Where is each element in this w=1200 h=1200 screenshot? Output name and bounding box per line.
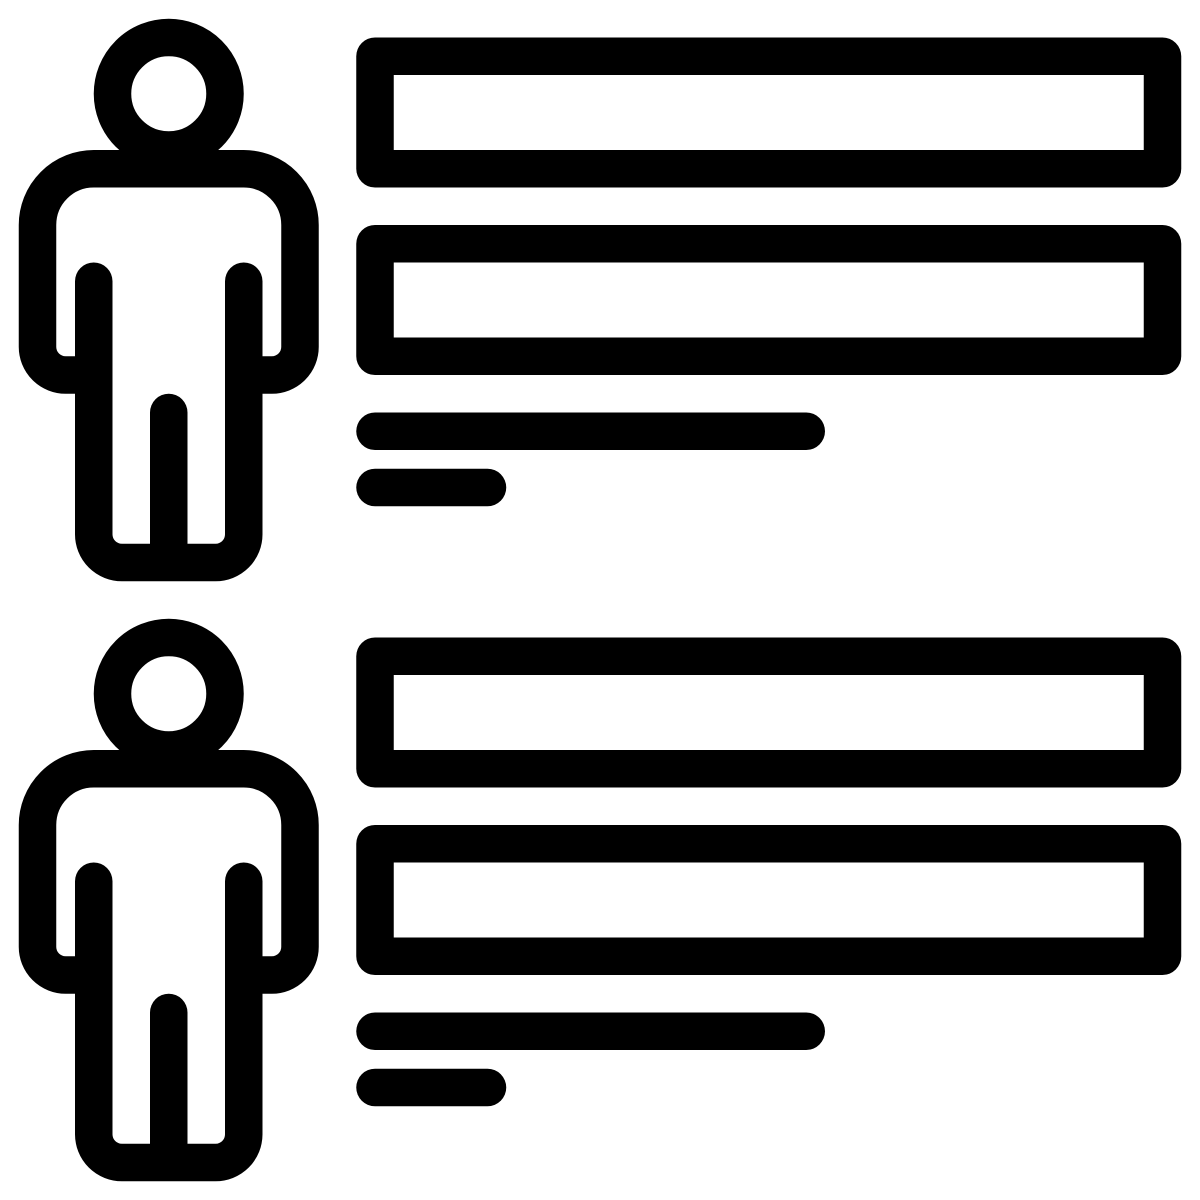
person head <box>112 638 225 750</box>
row 2 <box>38 638 1162 1162</box>
person legs outline <box>94 281 244 562</box>
person leg divider <box>150 412 188 550</box>
person body outline <box>38 769 300 975</box>
box 2 <box>375 244 1162 356</box>
icon: person 2 <box>38 638 300 1162</box>
line 4 <box>375 1069 488 1106</box>
person head <box>112 38 225 150</box>
box 3 <box>375 656 1162 769</box>
person body outline <box>38 169 300 375</box>
line 2 <box>375 469 488 506</box>
row 1 <box>38 38 1162 562</box>
line 1 <box>375 412 806 450</box>
person legs outline <box>94 881 244 1162</box>
box 4 <box>375 844 1162 956</box>
person leg divider <box>150 1012 188 1150</box>
box 1 <box>375 56 1162 169</box>
icon: person 1 <box>38 38 300 562</box>
line 3 <box>375 1012 806 1050</box>
